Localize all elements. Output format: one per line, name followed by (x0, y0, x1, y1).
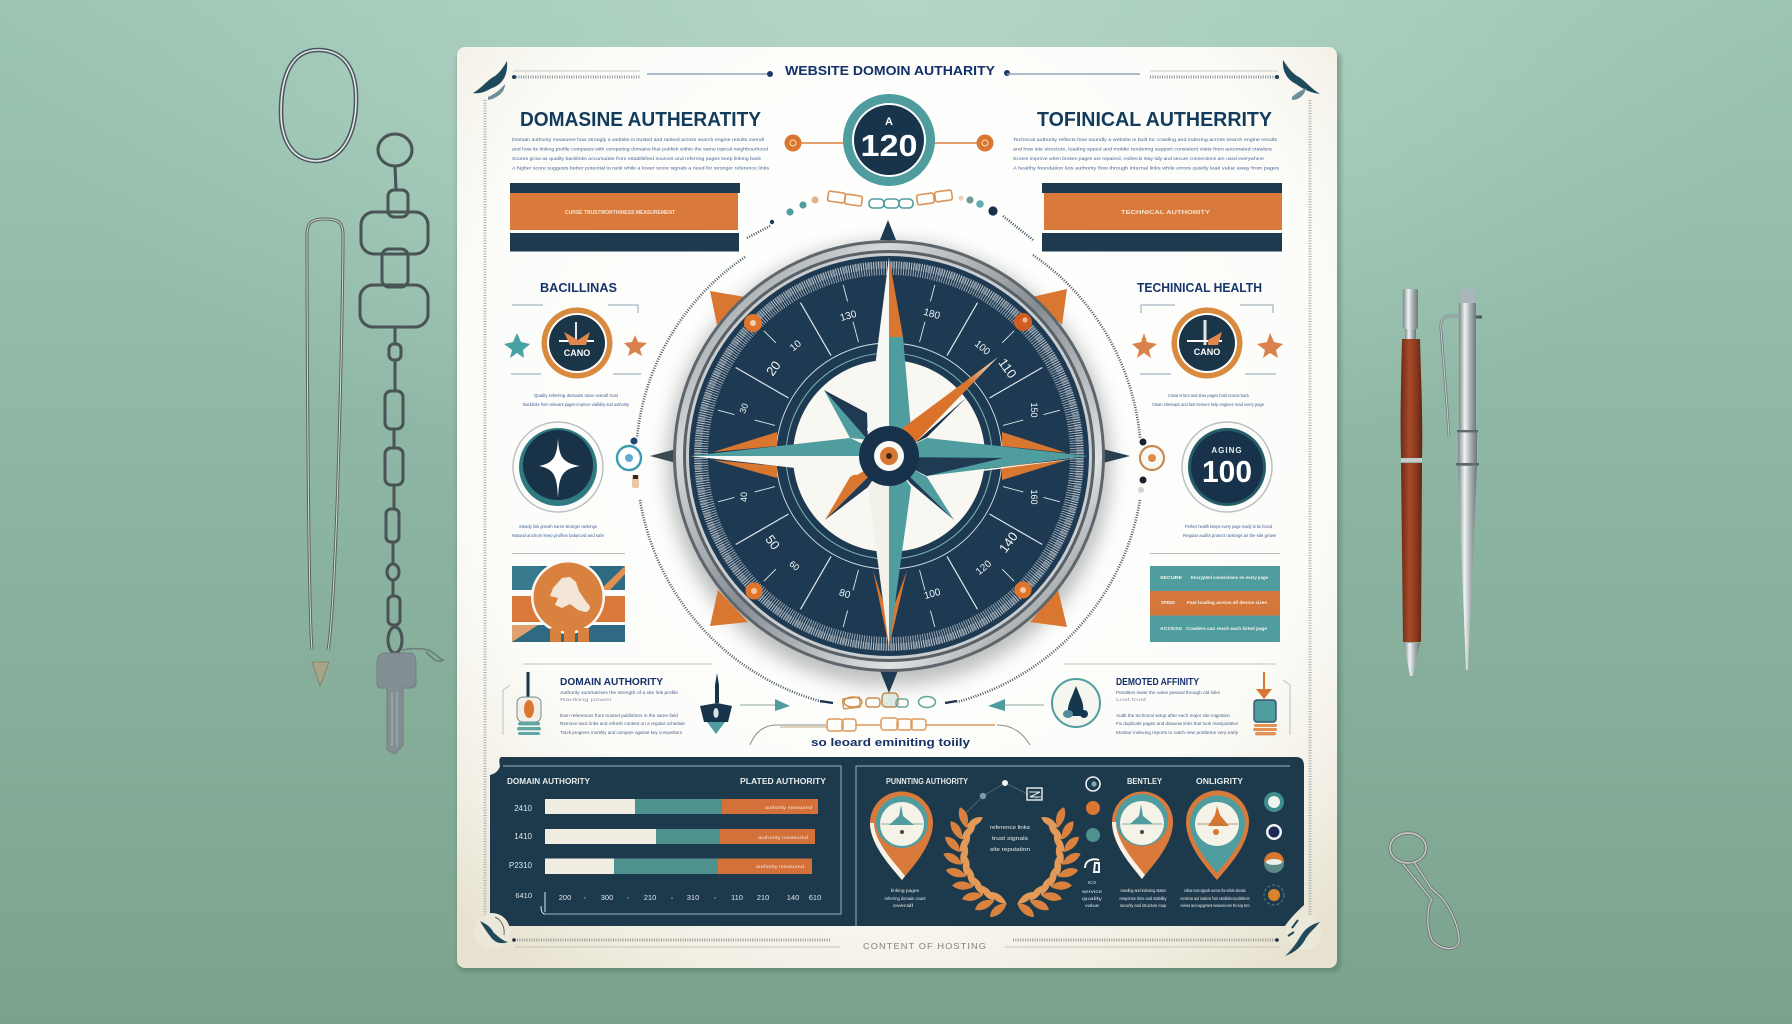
wreath text: trust signals (992, 836, 1029, 842)
small connected nodes (966, 780, 1042, 813)
dial numerals: 140 (996, 529, 1021, 555)
chart axis: 200 (559, 893, 571, 902)
text block: left badge caption: Natural anchors keep profiles balanced and safe (512, 533, 604, 538)
chart axis: 310 (687, 893, 699, 902)
pins panel (856, 766, 1290, 926)
text block: right badge caption: Regular audits protect rankings as the site grows (1183, 533, 1277, 538)
chart legend labels (507, 777, 827, 786)
map pin one (870, 792, 933, 880)
callout body text: Penalties lower the value passed through old links (1116, 690, 1221, 695)
bezel pins (744, 313, 1032, 600)
corner ornament top left (473, 61, 507, 100)
metal bezel (673, 240, 1105, 672)
chart axis: 210 (757, 893, 769, 902)
compass hub (859, 426, 919, 486)
banner: technical authority (1042, 183, 1282, 252)
icon: bell circle (1052, 679, 1100, 727)
callout: right demoted authority (988, 672, 1290, 735)
callout heading: DOMAIN AUTHORITY (560, 677, 663, 688)
bar row three: authority measured (756, 864, 805, 869)
score badge 100 (1182, 422, 1272, 512)
dial numerals: 40 (739, 492, 749, 502)
desk object: long pin (307, 219, 343, 686)
arrow right (740, 699, 790, 711)
left medal badge (511, 305, 641, 378)
pin labels (886, 777, 1244, 786)
wreath text: site reputation (990, 847, 1030, 853)
rule (1150, 552, 1280, 554)
dial numerals (738, 307, 1039, 602)
wreath text (990, 825, 1031, 853)
bar row two: 1410 (514, 832, 533, 841)
corner ornament bottom left (474, 913, 510, 949)
right status icons (1264, 792, 1284, 905)
pin labels: PUNNTING AUTHORITY (886, 777, 969, 786)
desk object: wooden pen (1401, 289, 1422, 676)
text block: domain authority intro (512, 137, 770, 172)
pin captions (884, 888, 1250, 909)
decorative chain above compass (747, 190, 1033, 240)
dial numerals: 130 (839, 309, 858, 324)
top medallion score: A (885, 116, 893, 128)
top rules (512, 70, 1279, 79)
dial numerals: 50 (762, 532, 783, 553)
dial numerals: 10 (788, 338, 804, 354)
callout body text: Remove toxic links and refresh content on a regular schedule (560, 721, 685, 726)
bar row two: authority measured (758, 835, 809, 840)
map pin three (1186, 791, 1249, 880)
pin captions: referring domain count (884, 896, 926, 902)
bar row one (514, 799, 818, 814)
chain link strands and caption (750, 693, 1030, 749)
chart axis (515, 891, 821, 914)
text block: domain authority intro: Scores grow as quality backlinks accumulate from established sources and referring pages keep linking back (512, 156, 762, 162)
small icon east (1138, 438, 1164, 493)
callout body text: Fix duplicate pages and disavow links that look manipulative (1116, 721, 1238, 726)
callout body text: Track progress monthly and compare against key competitors (560, 730, 683, 735)
star icon teal (504, 333, 530, 358)
pin labels: BENTLEY (1127, 777, 1163, 786)
text block: domain authority intro: and how its linking profile compares with competing domains that publish within the same topical neighbourhood (512, 146, 768, 152)
callout body text: Ranking power (560, 697, 613, 702)
poster dotted right border (1308, 100, 1312, 915)
chart legend labels: DOMAIN AUTHORITY (507, 777, 591, 786)
compass (650, 220, 1130, 693)
heading: domain authority: DOMASINE AUTHERATITY (520, 109, 762, 131)
pin captions: security and structure map (1120, 903, 1166, 909)
major dial lines (718, 285, 1060, 627)
callout: left domain authority (503, 672, 790, 735)
chart axis: 110 (731, 893, 743, 902)
desk object: chain with key (360, 134, 443, 754)
top medallion score (784, 94, 994, 186)
callout body text: Authority summarises the strength of a site link profile (560, 690, 679, 695)
pin captions: crawling and indexing status (1120, 888, 1166, 894)
bar row three (509, 858, 812, 874)
icon: pointer shield (700, 673, 732, 734)
corner orange triangles (710, 289, 1067, 627)
score badge 100: 100 (1202, 454, 1252, 489)
desk object: metal pen (1441, 289, 1482, 670)
chart frame (503, 766, 841, 914)
stacked stat list: Fast loading across all device sizes (1187, 600, 1267, 606)
small icon west (617, 438, 641, 488)
icon column: service (1082, 889, 1103, 894)
stacked stat list: SPEED (1161, 600, 1175, 606)
icon column: value (1085, 903, 1100, 908)
chart axis: 610 (809, 893, 821, 902)
pin captions: overall (893, 903, 913, 909)
stacked stat list: ACCESS (1160, 626, 1183, 632)
text block: left badge caption (512, 524, 604, 538)
icon column (1082, 777, 1103, 908)
dial numerals: 20 (763, 358, 784, 379)
stacked stat list (1150, 566, 1280, 642)
compass star points (690, 257, 1088, 647)
rule (512, 552, 625, 554)
desk object: silver ring (281, 50, 356, 161)
text block: right medal caption (1152, 393, 1264, 407)
text block: left medal caption (523, 393, 630, 407)
dial numerals: 60 (787, 559, 801, 573)
bottom rules (523, 663, 1276, 665)
callout body text: Monitor indexing reports to catch new problems very early (1116, 730, 1239, 735)
bar chart (507, 777, 827, 914)
dial numerals: 100 (972, 339, 992, 358)
dark data panel (490, 757, 1304, 926)
text block: technical authority intro: Technical authority reflects how soundly a website is built for crawling and indexing across search engine results (1013, 137, 1278, 143)
text block: left medal caption: Quality referring domains raise overall trust (534, 393, 619, 398)
text block: right badge caption (1183, 524, 1277, 538)
compass needle (900, 357, 998, 443)
scale ticks (698, 265, 1080, 647)
dial numerals: 160 (1029, 489, 1039, 505)
wreath text: reference links (990, 825, 1031, 831)
callout body text (1116, 690, 1239, 735)
footer caption: CONTENT OF HOSTING (863, 941, 987, 951)
text block: right medal caption: Clean sitemaps and fast servers help engines read every page (1152, 402, 1264, 407)
star icons orange pair (1132, 333, 1283, 358)
text block: left medal caption: Backlinks from relevant pages improve visibility and authority (523, 402, 630, 407)
pin captions: reviews and engagement measured over the long term (1180, 903, 1250, 909)
bar row one: authority measured (765, 805, 813, 810)
callout body text (560, 690, 685, 735)
right medal badge: CANO (1194, 347, 1220, 357)
bar row one: 2410 (514, 804, 533, 813)
chart axis: 300 (601, 893, 613, 902)
callout body text: Earn references from trusted publishers in the same field (560, 713, 679, 718)
cardinal outer spikes (650, 220, 1130, 693)
score badge 100: AGING (1211, 446, 1243, 455)
stacked stat list: SECURE (1160, 575, 1183, 581)
dial numerals: 110 (995, 355, 1020, 381)
pin captions: online trust signals across the whole domain (1184, 888, 1246, 894)
desk object: small loop clip (1390, 833, 1459, 949)
callout body text: Lost trust (1116, 697, 1147, 702)
dial numerals: 180 (922, 307, 942, 322)
corner ornament top right (1283, 60, 1320, 100)
laurel wreath (943, 806, 1081, 919)
right section label: TECHINICAL HEALTH (1137, 280, 1262, 295)
callout body text: Audit the technical setup after each major site migration (1116, 713, 1231, 718)
text block: technical authority intro: A healthy foundation lets authority flow through internal links while errors quietly leak value away from pages (1013, 166, 1280, 172)
left medal badge: CANO (564, 348, 590, 358)
corner ornament bottom right (1285, 914, 1322, 956)
left star badge (513, 422, 603, 512)
heading: technical authority: TOFINICAL AUTHERRITY (1037, 109, 1273, 131)
dial face (689, 256, 1089, 656)
bar row three: P2310 (509, 861, 533, 870)
poster dotted left border (484, 100, 486, 918)
text block: left badge caption: Steady link growth earns stronger rankings (519, 524, 598, 529)
dial numerals: 30 (738, 402, 750, 415)
chart axis: 140 (787, 893, 799, 902)
top medallion score: 120 (860, 128, 918, 163)
text block: right badge caption: Perfect health keeps every page ready to be found (1185, 524, 1272, 529)
stacked stat list: Crawlers can reach each listed page (1186, 626, 1267, 632)
chart legend labels: PLATED AUTHORITY (740, 777, 827, 786)
map pin two (1112, 792, 1173, 879)
inner dial rings (776, 343, 1002, 569)
compass shadow (667, 242, 1111, 686)
bar row two (514, 829, 815, 844)
icon column: quality (1082, 896, 1103, 901)
left section label: BACILLINAS (540, 280, 617, 295)
icon: right tube gauge (1253, 672, 1290, 735)
pin captions: mentions and citations from established publishers (1180, 896, 1250, 902)
pin labels: ONLIGRITY (1196, 777, 1244, 786)
banner: domain authority: CURSE TRUSTWORTHINESS MEASUREMENT (565, 210, 676, 216)
poster sheet (457, 47, 1341, 972)
text block: domain authority intro: Domain authority measures how strongly a website is trusted and ranked across search engine results overall (512, 137, 764, 143)
banner: domain authority (510, 183, 740, 252)
caption: so leoard eminiting toiily (811, 737, 971, 749)
chart axis: 6410 (515, 891, 532, 900)
star icon orange (624, 335, 647, 356)
text block: domain authority intro: A higher score suggests better potential to rank while a lower score signals a need for stronger reference links (512, 166, 770, 172)
text block: technical authority intro: Scores improve when broken pages are repaired, redirects stay tidy and secure connections are used everywhere (1013, 156, 1264, 162)
text block: technical authority intro: and how site structure, loading speed and mobile rendering support consistent visits from automated crawlers (1013, 146, 1273, 152)
dial numerals: 150 (1029, 402, 1039, 418)
dial numerals: 80 (838, 588, 852, 601)
icon: left tube gauge (503, 672, 541, 735)
arrow left (988, 699, 1044, 711)
text block: right medal caption: Crawl errors and slow pages hold scores back (1168, 393, 1250, 398)
dashed orbit arcs around compass (637, 255, 1140, 702)
text block: technical authority intro (1013, 137, 1280, 172)
banner: technical authority: TECHNICAL AUTHORITY (1121, 210, 1211, 216)
callout heading: DEMOTED AFFINITY (1116, 677, 1199, 688)
stacked stat list: Encrypted connections on every page (1191, 575, 1268, 581)
title: WEBSITE DOMOIN AUTHARITY (785, 64, 996, 78)
pin captions: response time and stability (1120, 896, 1167, 902)
left flag map graphic (512, 560, 625, 642)
footer rules (512, 938, 1280, 947)
right medal badge (1140, 305, 1276, 378)
chart axis: 210 (644, 893, 656, 902)
icon column: ICO (1088, 880, 1097, 885)
pin captions: linking pages (891, 888, 920, 894)
dial numerals: 100 (923, 587, 942, 602)
dial numerals: 120 (974, 558, 994, 578)
